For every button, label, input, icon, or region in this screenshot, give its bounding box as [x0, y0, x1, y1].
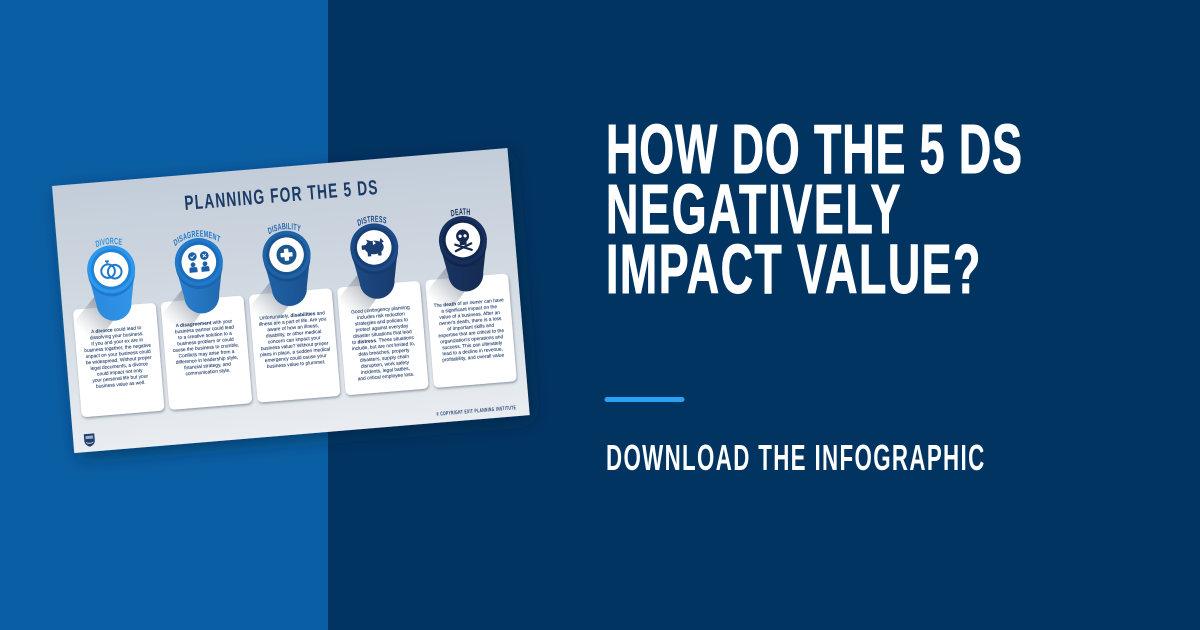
card text: disability: concern can impact your: [268, 335, 321, 345]
card text: death: lead to a decline in revenue,: [442, 346, 503, 357]
call to action: DOWNLOAD THE INFOGRAPHIC: [606, 439, 984, 478]
card text: disability: aware of how an illness,: [267, 323, 319, 333]
card text: divorce: If you and your ex are in: [91, 337, 144, 347]
card: disagreement: [161, 295, 252, 410]
card text: disagreement: financial strategy, and: [184, 361, 231, 371]
card text: disability: Unfortunately, disabilities and: [259, 311, 325, 322]
card text: death: expertise that are critical to the: [438, 328, 505, 339]
column shadows: [69, 265, 467, 345]
card text: disability: emergency could cause your: [265, 353, 327, 364]
card text: disagreement: business problem or could: [177, 337, 234, 347]
label: death: DEATH: [450, 208, 470, 216]
card text: divorce: be widespread. Without proper: [86, 355, 152, 366]
card text: death: organization's operations and: [440, 334, 504, 345]
card text: divorce: business value as well.: [96, 380, 146, 390]
card text: death: a significant impact on the: [441, 304, 498, 315]
card: disability: [249, 288, 340, 403]
card text: divorce: could impact not only: [97, 368, 143, 378]
card text: disagreement: A disagreement with your: [176, 319, 232, 329]
card text: distress: include, but are not limited to,: [352, 341, 415, 352]
card text: disagreement: Conflicts may arise from a: [178, 349, 235, 360]
card text: divorce: impact on your business could: [86, 349, 151, 360]
icon: skull and crossbones: [454, 229, 472, 251]
icon: medical plus: [276, 244, 297, 266]
card text: distress: data breaches, property: [358, 348, 410, 358]
label: disagreement: DISAGREEMENT: [173, 230, 220, 246]
card text: death: owner's death, there is a loss: [439, 316, 502, 327]
card: divorce: [73, 303, 165, 417]
card text: distress: to distress. These situations: [352, 336, 414, 346]
card: distress: [337, 281, 429, 395]
paper title: PLANNING FOR THE 5 DS: [183, 175, 378, 215]
card text: disability: business value? Without proper: [261, 341, 329, 352]
label: disability: DISABILITY: [268, 223, 301, 234]
card text: disagreement: business partner could lead: [175, 324, 235, 335]
card text: distress: disaster situations that lead: [353, 329, 412, 340]
background: left blue panel: [0, 0, 328, 630]
card text: disability: disability, or other medical: [266, 329, 322, 340]
card text: divorce: your personal life but your: [92, 373, 149, 384]
card text: distress: strategies and policies to: [355, 317, 409, 327]
card text: divorce: business together, the negative: [84, 343, 152, 354]
card text: death: The death of an owner can have: [434, 298, 504, 309]
heading: HOW DO THE 5 DS: [606, 111, 1022, 188]
icon: wedding rings: [100, 259, 122, 280]
heading: IMPACT VALUE?: [606, 231, 980, 308]
card text: distress: Good contingency planning: [351, 305, 410, 316]
card text: distress: incidents, legal battles,: [361, 366, 410, 376]
card text: death: success. This can ultimately: [442, 340, 503, 351]
column: distress: [350, 216, 398, 299]
card text: divorce: A divorce could lead to: [91, 326, 142, 335]
card text: distress: disasters, supply chain: [360, 354, 409, 364]
card text: disagreement: to a creative solution to a: [178, 331, 232, 341]
accent rule: [604, 397, 684, 402]
column: disability: [262, 223, 311, 306]
card text: divorce: dissolving your business.: [90, 331, 144, 341]
paper sheet: [52, 148, 530, 453]
card text: distress: and critical employee loss.: [357, 372, 415, 382]
column: divorce: [87, 238, 136, 321]
logo shield: [84, 433, 95, 447]
label: divorce: DIVORCE: [95, 238, 122, 248]
card text: disagreement: difference in leadership style,: [176, 355, 239, 366]
heading: [606, 111, 1022, 308]
card text: distress: disruption, work safety: [361, 360, 410, 370]
card: death: [425, 273, 517, 388]
icon: piggy bank: [361, 238, 385, 257]
card text: disagreement: cause the business to crumble.: [172, 342, 240, 354]
infographic paper thumbnail: [49, 148, 535, 466]
card text: disability: illness are a part of life. Are you: [259, 316, 327, 328]
card text: disability: business value to plummet.: [267, 359, 326, 370]
card text: divorce: legal documents, a divorce: [90, 361, 149, 372]
column: death: [438, 208, 487, 292]
heading: NEGATIVELY: [606, 171, 900, 248]
card text: death: of important skills and: [447, 323, 495, 333]
card text: distress: includes risk reduction: [357, 311, 405, 321]
card text: death: profitability, and overall value: [442, 352, 505, 364]
card text: disagreement: communication style.: [185, 368, 231, 377]
copyright note: © COPYRIGHT EXIT PLANNING INSTITUTE: [436, 403, 516, 417]
card text: distress: protect against everyday: [355, 323, 409, 334]
card text: disability: plans in place, a sudden medical: [260, 347, 330, 358]
card text: death: value of a business. After an: [439, 310, 501, 321]
icon: two people disagreeing: [188, 251, 210, 273]
label: distress: DISTRESS: [357, 216, 386, 226]
column: disagreement: [173, 230, 223, 314]
